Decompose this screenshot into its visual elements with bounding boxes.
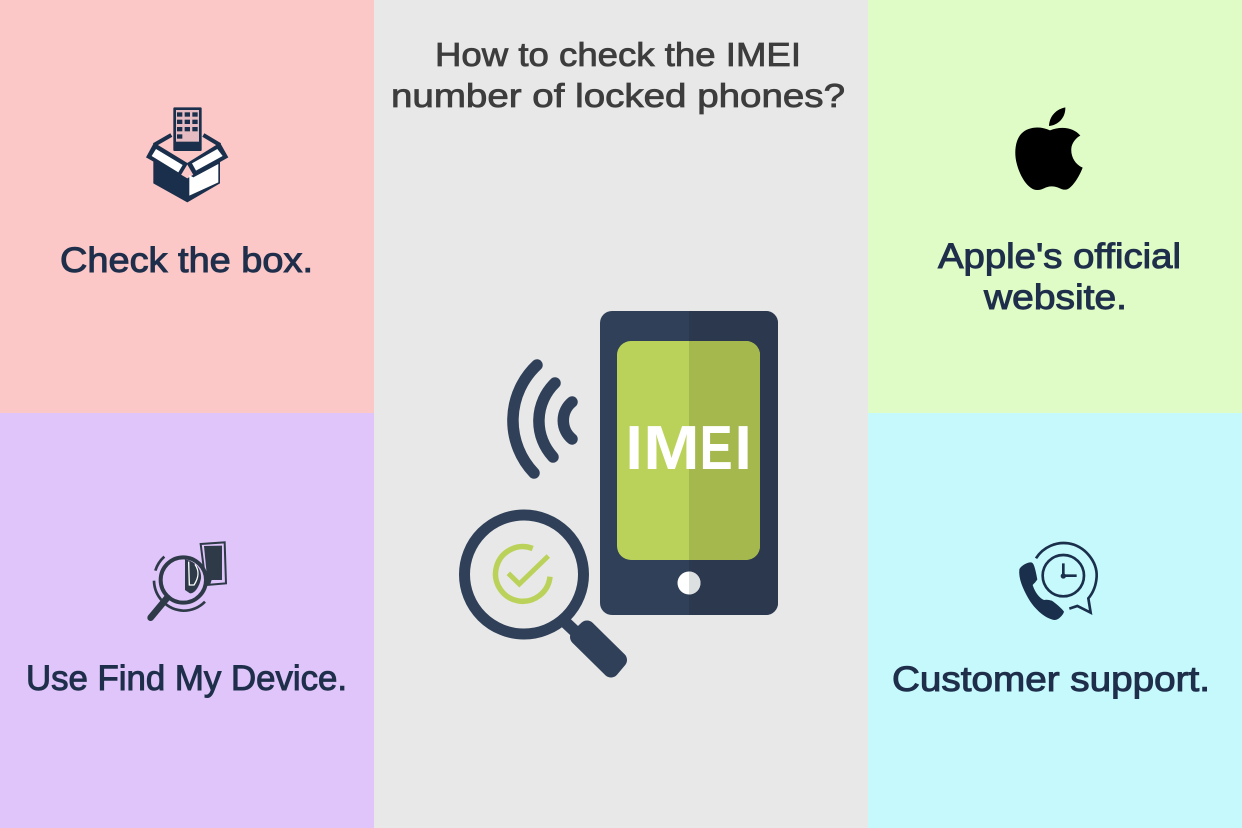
check mark <box>496 547 550 601</box>
IMEI text: M <box>643 414 700 483</box>
label: use find my device: Use Find My Device. <box>26 659 347 698</box>
panel: check the box <box>0 0 374 413</box>
title: number of locked phones? <box>391 77 845 114</box>
illustration: IMEI phone <box>600 311 778 615</box>
icon: phone and clock bubble <box>1019 543 1097 620</box>
label: apple's official website <box>938 237 1181 317</box>
label: apple's official website: Apple's official <box>938 237 1181 276</box>
IMEI text: E <box>700 414 733 483</box>
IMEI text <box>626 414 752 483</box>
label: apple's official website: website. <box>983 278 1127 317</box>
icon: phone in open box <box>146 107 228 202</box>
panel: apple website <box>868 0 1242 413</box>
title: How to check the IMEI <box>435 36 801 73</box>
icon: signal waves <box>513 365 572 473</box>
IMEI text: I <box>626 414 643 483</box>
label: customer support: Customer support. <box>892 660 1210 699</box>
panel: center background <box>374 0 868 828</box>
panel: customer support <box>868 413 1242 828</box>
IMEI text: I <box>734 414 752 483</box>
icon: apple logo <box>1015 107 1083 190</box>
phone screen <box>617 341 760 560</box>
title <box>391 36 845 114</box>
label: check the box: Check the box. <box>60 241 313 280</box>
home button <box>678 572 700 594</box>
icon: magnifier with check <box>464 515 619 670</box>
panel: find my device <box>0 413 374 828</box>
icon: magnifier and phone <box>151 542 226 618</box>
